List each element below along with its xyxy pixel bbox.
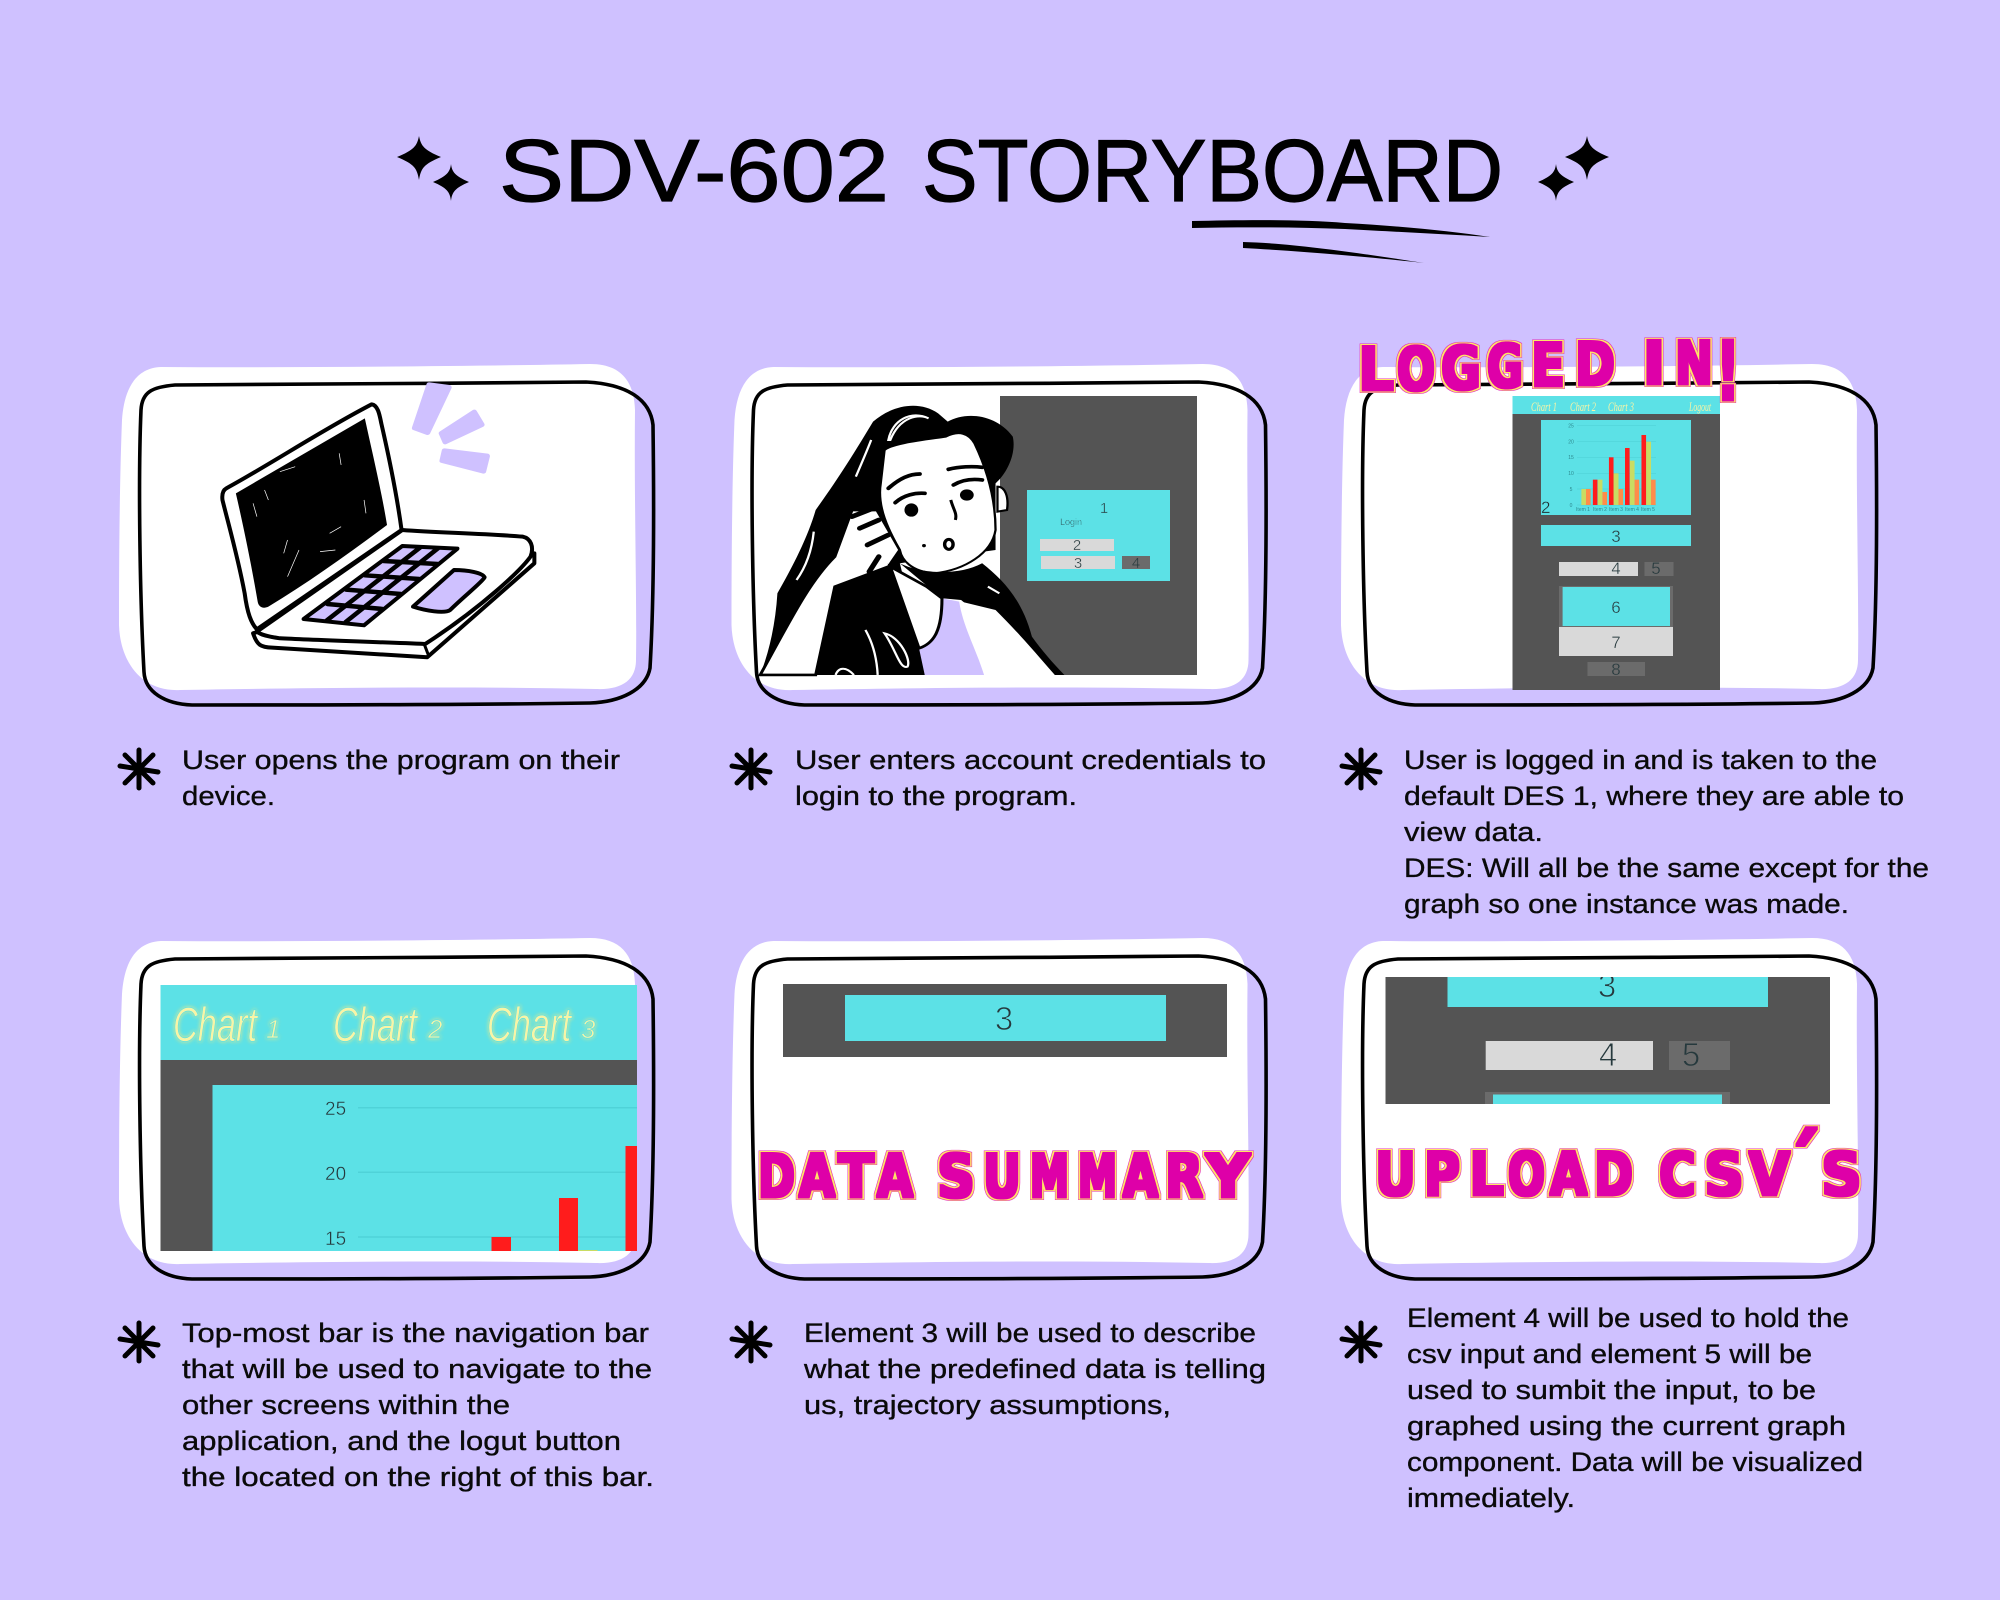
illustration: woman thinking <box>760 406 1064 675</box>
heading: data summary: T <box>838 1142 874 1212</box>
elements 3 to 8: 5 <box>1651 559 1661 578</box>
description text: User enters account credentials to <box>795 745 1266 775</box>
description text: DES: Will all be the same except for the <box>1404 853 1929 883</box>
icon: bullet asterisk <box>120 750 158 788</box>
elements 3 to 8 <box>1541 525 1691 679</box>
description text: what the predefined data is telling <box>803 1354 1266 1384</box>
heading: upload csv: S <box>1821 1140 1862 1210</box>
bar chart: 25 <box>1568 424 1574 430</box>
heading: data summary: M <box>1030 1142 1069 1212</box>
description text: Top-most bar is the navigation bar <box>182 1318 649 1348</box>
heading: upload csv: L <box>1469 1140 1504 1210</box>
description text: device. <box>182 781 275 811</box>
description text: other screens within the <box>182 1390 510 1420</box>
icon: bullet asterisk <box>1342 750 1380 788</box>
icon: laptop <box>222 385 534 657</box>
heading: upload csv: P <box>1424 1140 1460 1210</box>
heading: upload csv: V <box>1749 1140 1790 1210</box>
heading: logged in: G <box>1487 332 1523 402</box>
heading: logged in: I <box>1642 329 1666 399</box>
heading: data summary: U <box>983 1142 1021 1212</box>
navigation bar <box>1512 396 1720 414</box>
elements 3 to 8: 8 <box>1611 660 1621 679</box>
heading: logged in: G <box>1441 334 1481 404</box>
zoomed navigation bar and chart: 1 <box>266 1014 280 1044</box>
navigation bar: Logout <box>1688 399 1711 414</box>
heading: data summary: A <box>877 1142 913 1212</box>
title <box>397 121 1609 263</box>
elements 3 to 8: 4 <box>1611 559 1621 578</box>
heading: logged in: ! <box>1716 325 1740 420</box>
title text <box>499 121 1503 220</box>
bar chart: 0 <box>1570 503 1573 509</box>
icon: sparkles left <box>397 136 469 201</box>
description text: User opens the program on their <box>182 745 620 775</box>
description text: component. Data will be visualized <box>1407 1447 1863 1477</box>
login screen mockup: 1 <box>1100 500 1108 517</box>
description text: application, and the logut button <box>182 1426 621 1456</box>
navigation bar: Chart 3 <box>1608 399 1634 414</box>
heading: data summary: Y <box>1205 1142 1252 1212</box>
heading: logged in: O <box>1397 335 1435 405</box>
description text <box>182 745 620 811</box>
login screen mockup: 2 <box>1073 537 1081 554</box>
bar chart: 20 <box>1568 440 1574 446</box>
zoomed navigation bar and chart: Chart <box>487 999 572 1052</box>
bar chart: 10 <box>1568 471 1574 477</box>
heading: logged in: E <box>1531 331 1565 401</box>
heading: upload csv: U <box>1375 1140 1416 1210</box>
panel: opens program <box>119 364 654 811</box>
zoomed navigation bar and chart: 2 <box>427 1014 443 1044</box>
heading: upload csv: O <box>1508 1140 1545 1210</box>
description text <box>795 745 1266 811</box>
title text: SDV-602 <box>499 121 889 220</box>
navigation bar: Chart 1 <box>1531 399 1557 414</box>
bar chart: Item 3 <box>1609 507 1623 513</box>
navigation bar: Chart 2 <box>1570 399 1596 414</box>
zoomed navigation bar and chart: Chart <box>173 999 258 1052</box>
icon: sparkles right <box>1538 136 1609 201</box>
zoomed elements 3 4 5: 4 <box>1599 1036 1617 1073</box>
description text: csv input and element 5 will be <box>1407 1339 1812 1369</box>
bar chart: 15 <box>1568 455 1574 461</box>
heading: data summary: M <box>1078 1142 1117 1212</box>
panel: logged in <box>1341 325 1929 919</box>
zoomed navigation bar and chart: 25 <box>325 1099 346 1120</box>
elements 3 to 8: 7 <box>1611 633 1621 652</box>
heading: upload csv: S <box>1704 1140 1744 1210</box>
panel: upload csv <box>1341 938 1877 1513</box>
zoomed navigation bar and chart: 15 <box>325 1229 346 1250</box>
description text: graph so one instance was made. <box>1404 889 1849 919</box>
description text: default DES 1, where they are able to <box>1404 781 1904 811</box>
description text: the located on the right of this bar. <box>182 1462 654 1492</box>
heading: data summary: D <box>758 1142 795 1212</box>
title text: STORYBOARD <box>922 121 1503 220</box>
heading: data summary: S <box>937 1142 975 1212</box>
description text <box>1407 1303 1863 1513</box>
heading: data summary: A <box>1123 1142 1158 1212</box>
description text <box>1404 745 1929 919</box>
login screen mockup: Login <box>1060 517 1082 527</box>
panel: login <box>732 364 1266 811</box>
title underline strokes <box>1192 220 1490 263</box>
icon: bullet asterisk <box>120 1323 158 1361</box>
heading: logged in: N <box>1675 329 1713 399</box>
zoomed elements 3 4 5: 5 <box>1682 1036 1700 1073</box>
elements 3 to 8: 6 <box>1611 598 1621 617</box>
zoomed element 3 <box>783 984 1227 1057</box>
login screen mockup: 4 <box>1132 555 1140 572</box>
heading: upload csv: ´ <box>1784 1116 1820 1228</box>
zoomed navigation bar and chart: 3 <box>581 1014 596 1044</box>
heading: logged in: D <box>1575 330 1615 400</box>
zoomed element 3: 3 <box>995 1000 1013 1037</box>
description text <box>182 1318 654 1492</box>
description text: view data. <box>1404 817 1543 847</box>
icon: bullet asterisk <box>1342 1323 1380 1361</box>
description text: login to the program. <box>795 781 1077 811</box>
zoomed elements 3 4 5: 3 <box>1598 967 1616 1004</box>
heading: data summary: A <box>799 1142 835 1212</box>
description text: used to sumbit the input, to be <box>1407 1375 1816 1405</box>
bar chart: 5 <box>1570 487 1573 493</box>
description text: that will be used to navigate to the <box>182 1354 652 1384</box>
description text: graphed using the current graph <box>1407 1411 1846 1441</box>
heading: logged in: L <box>1358 335 1394 405</box>
zoomed navigation bar and chart: 20 <box>325 1164 346 1185</box>
heading: upload csv: D <box>1594 1140 1633 1210</box>
description text <box>803 1318 1266 1420</box>
login screen mockup <box>1000 396 1197 675</box>
bar chart: 2 <box>1541 498 1550 517</box>
description text: User is logged in and is taken to the <box>1404 745 1877 775</box>
heading: upload csv: A <box>1550 1140 1587 1210</box>
description text: immediately. <box>1407 1483 1575 1513</box>
description text: us, trajectory assumptions, <box>804 1390 1171 1420</box>
heading: upload csv: C <box>1659 1140 1696 1210</box>
panel: data summary <box>732 938 1266 1420</box>
heading: data summary: R <box>1165 1142 1203 1212</box>
app screen mockup <box>1512 396 1720 690</box>
bar chart: Item 1 <box>1576 507 1590 513</box>
zoomed navigation bar and chart: Chart <box>333 999 418 1052</box>
bar chart: Item 5 <box>1641 507 1655 513</box>
bar chart <box>1541 420 1691 517</box>
description text: Element 3 will be used to describe <box>804 1318 1256 1348</box>
icon: bullet asterisk <box>732 1323 770 1361</box>
icon: bullet asterisk <box>732 750 770 788</box>
zoomed elements 3 4 5 <box>1386 967 1830 1104</box>
bar chart: Item 2 <box>1593 507 1607 513</box>
zoomed navigation bar and chart <box>160 985 637 1251</box>
description text: Element 4 will be used to hold the <box>1407 1303 1849 1333</box>
bar chart: Item 4 <box>1625 507 1639 513</box>
elements 3 to 8: 3 <box>1611 527 1621 546</box>
panel: navigation bar <box>119 938 654 1492</box>
login screen mockup: 3 <box>1074 555 1082 572</box>
